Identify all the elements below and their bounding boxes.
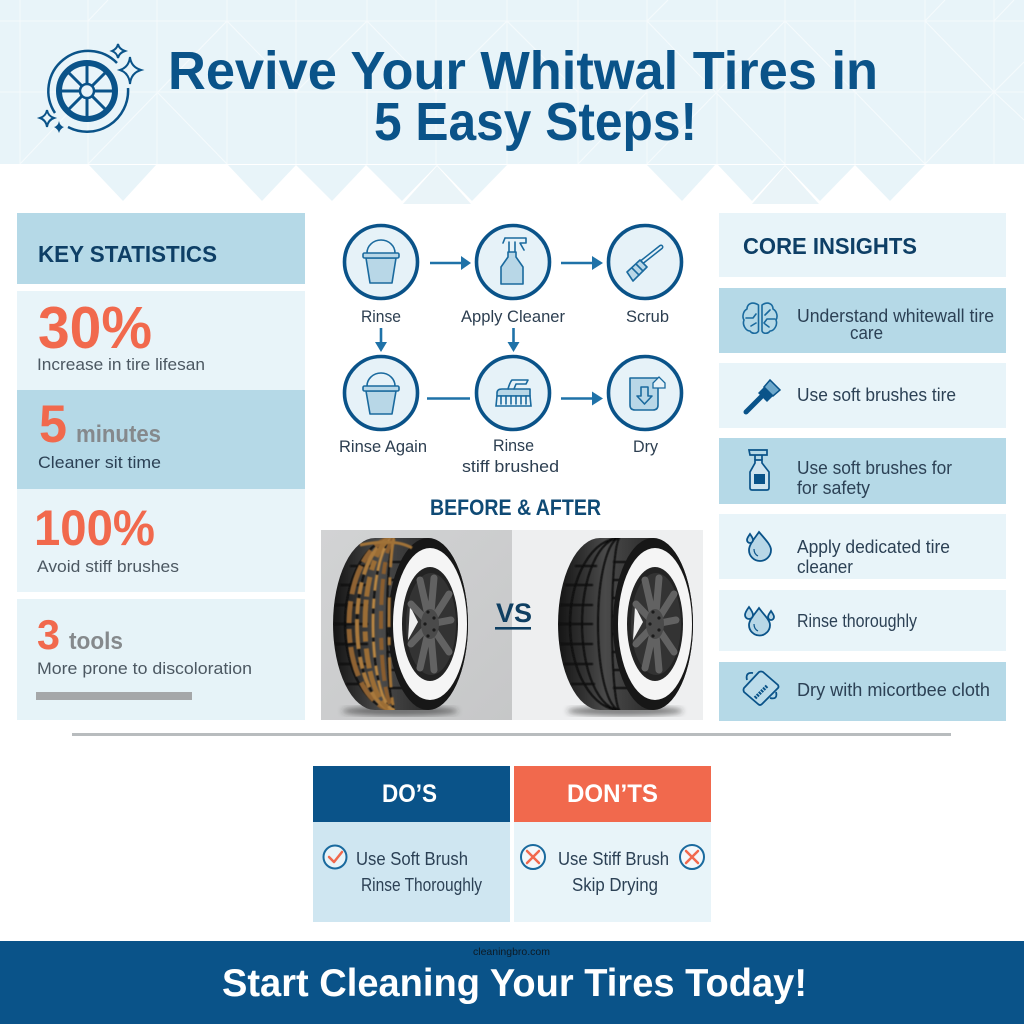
panel: process steps	[339, 226, 682, 476]
header background	[0, 0, 1024, 164]
after clean tire	[558, 538, 693, 716]
panel: do's: Use Soft Brush	[356, 849, 468, 869]
panel: key statistics	[17, 213, 305, 720]
panel: don'ts: DON’TS	[567, 780, 658, 808]
title: Revive Your Whitwal Tires in	[168, 41, 878, 101]
panel: don'ts: Use Stiff Brush	[558, 849, 669, 869]
stat: 5 minutes	[17, 390, 305, 489]
stat: 3 tools: tools	[69, 628, 123, 655]
core insights heading: CORE INSIGHTS	[743, 233, 917, 259]
panel: do's: Rinse Thoroughly	[361, 875, 482, 895]
stat: 5 minutes: Cleaner sit time	[38, 453, 161, 472]
insight: use soft brushes for safety	[719, 438, 1006, 504]
insight: rinse thoroughly: Rinse thoroughly	[797, 611, 917, 631]
stat: 30%: Increase in tire lifesan	[37, 355, 205, 374]
step: scrub: Scrub	[626, 307, 669, 326]
step: rinse	[344, 226, 418, 326]
icon: water drop	[747, 532, 771, 561]
stat: 100%: 100%	[34, 500, 155, 556]
icon: spray bottle	[749, 450, 769, 490]
stat: 3 tools: 3	[37, 611, 60, 658]
arrow: rinse to apply cleaner	[430, 256, 471, 270]
insight: rinse thoroughly	[719, 590, 1006, 651]
step: dry	[608, 356, 682, 456]
divider	[72, 733, 951, 736]
connector: rinse again to brushed	[427, 397, 470, 400]
footer banner	[0, 941, 1024, 1024]
step: apply cleaner	[461, 226, 565, 326]
panel: do's	[313, 766, 510, 922]
step: rinse stiff brushed: stiff brushed	[462, 457, 559, 476]
stat: 30%	[17, 291, 305, 390]
step: rinse stiff brushed	[462, 356, 559, 476]
insight: dry with microfiber cloth	[719, 662, 1006, 721]
stat: 30%: 30%	[38, 295, 152, 361]
icon: brain	[743, 303, 777, 333]
footer banner: Start Cleaning Your Tires Today!	[222, 962, 807, 1005]
stat: 100%: Avoid stiff brushes	[37, 557, 179, 576]
step: dry: Dry	[633, 437, 658, 456]
insight: apply dedicated tire cleaner: cleaner	[797, 557, 853, 577]
icon: paint brush	[746, 380, 780, 412]
step: rinse again: Rinse Again	[339, 437, 427, 456]
insight: use soft brushes for safety: Use soft brushes for	[797, 458, 952, 478]
icon: sparkling wheel logo	[40, 44, 141, 133]
stat: 3 tools: More prone to discoloration	[37, 659, 252, 678]
insight: dry with microfiber cloth: Dry with micortbee cloth	[797, 680, 990, 700]
panel: core insights	[719, 213, 1006, 721]
step: rinse stiff brushed: Rinse	[493, 436, 534, 455]
step: apply cleaner: Apply Cleaner	[461, 307, 565, 326]
decorative triangles under header	[89, 165, 925, 204]
panel: do's: DO’S	[382, 780, 437, 808]
stat: 3 tools	[17, 599, 305, 720]
key statistics heading	[17, 213, 305, 284]
insight: apply dedicated tire cleaner	[719, 514, 1006, 579]
core insights heading	[719, 213, 1006, 277]
panel: don'ts	[514, 766, 711, 922]
key statistics heading: KEY STATISTICS	[38, 241, 217, 267]
arrow: brushed to dry	[561, 392, 603, 406]
vs label: VS	[496, 598, 532, 628]
before tire with rust	[333, 538, 468, 716]
icon: water drops	[745, 607, 774, 636]
panel: before and after comparison	[321, 530, 703, 720]
arrow: apply cleaner down	[508, 328, 520, 352]
panel: don'ts: Skip Drying	[572, 875, 658, 895]
insight: use soft brushes for safety: for safety	[797, 478, 870, 498]
stat: 100%	[17, 489, 305, 592]
stat: 5 minutes: minutes	[76, 421, 161, 448]
insight: use soft brushes tire: Use soft brushes tire	[797, 385, 956, 405]
footer banner: cleaningbro.com	[473, 946, 550, 958]
title: 5 Easy Steps!	[374, 92, 697, 152]
title	[168, 41, 878, 152]
arrow: apply cleaner to scrub	[561, 256, 603, 270]
icon: cross right	[680, 845, 704, 869]
insight: understand whitewall care	[719, 288, 1006, 353]
arrow: rinse down	[375, 328, 387, 352]
insight: understand whitewall care: Understand whitewall tire	[797, 306, 994, 326]
icon: cross left	[521, 845, 545, 869]
stat: 5 minutes: 5	[39, 395, 67, 454]
icon: check	[324, 846, 346, 868]
step: rinse: Rinse	[361, 307, 401, 326]
insight: apply dedicated tire cleaner: Apply dedicated tire	[797, 537, 950, 557]
step: scrub	[608, 226, 682, 326]
step: rinse again	[339, 356, 427, 456]
insight: use soft brushes tire	[719, 363, 1006, 428]
icon: cloth	[744, 672, 778, 705]
insight: understand whitewall care: care	[850, 323, 883, 343]
before and after heading: BEFORE & AFTER	[430, 495, 601, 520]
